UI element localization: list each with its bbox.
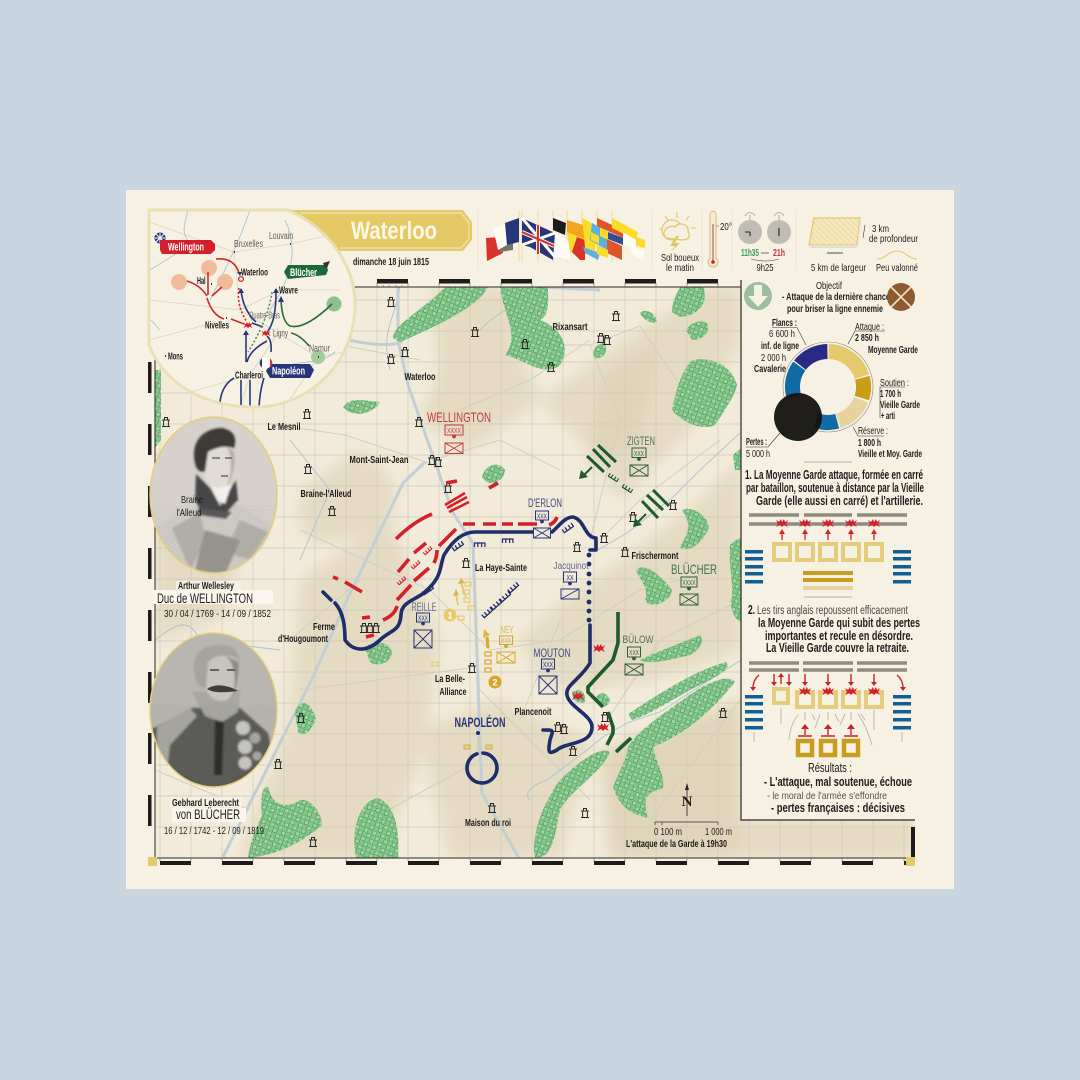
icon: weather: le matin bbox=[666, 262, 694, 274]
icon: chronometers and duration bbox=[738, 212, 791, 274]
scale bar: L'attaque de la Garde à 19h30 bbox=[626, 839, 727, 850]
Wellington's red line bbox=[333, 481, 557, 637]
step 2 text: 2. bbox=[748, 603, 755, 617]
donut labels: Cavalerie bbox=[754, 364, 786, 375]
unit echelon marks: XXX bbox=[629, 648, 639, 657]
French combs bbox=[422, 523, 574, 618]
Napoleon tag bbox=[260, 358, 314, 378]
objective text: pour briser la ligne ennemie bbox=[787, 303, 883, 315]
panel: strategic inset map bbox=[149, 210, 355, 407]
inset place names bbox=[168, 231, 330, 382]
unit symbols bbox=[414, 425, 698, 694]
icon: chronometers and duration: 11h35 bbox=[741, 248, 759, 259]
donut labels: Moyenne Garde bbox=[868, 345, 918, 356]
scale bar bbox=[626, 822, 732, 850]
Ney cavalry, yellow units: 1 bbox=[447, 610, 453, 620]
forests bbox=[155, 280, 741, 858]
objective text: - Attaque de la dernière chance bbox=[782, 291, 890, 303]
inset place names: Hal bbox=[197, 276, 206, 287]
title banner: Waterloo bbox=[351, 217, 437, 245]
icon: chronometers and duration: 21h bbox=[773, 248, 785, 259]
results text: - L'attaque, mal soutenue, échoue bbox=[764, 775, 912, 789]
portrait: Blucher bbox=[150, 633, 280, 790]
place names: Waterloo bbox=[404, 371, 436, 383]
step 1 text: 1. La Moyenne Garde attaque, formée en carré bbox=[745, 468, 923, 482]
Wellington tag: Wellington bbox=[168, 242, 204, 254]
commander labels: REILLE bbox=[412, 602, 437, 614]
unit echelon marks: XXXX bbox=[447, 426, 461, 435]
commander labels: BÜLOW bbox=[622, 634, 654, 646]
step 2 text: importantes et recule en désordre. bbox=[765, 629, 913, 643]
commander labels: Jacquinot bbox=[554, 560, 589, 572]
inset movement arrows bbox=[187, 259, 332, 407]
inset terrain lines bbox=[149, 222, 355, 407]
icon: weather: Sol boueux bbox=[661, 252, 700, 264]
inset place names: Nivelles bbox=[205, 320, 229, 332]
battle blasts bbox=[572, 644, 609, 731]
commander labels bbox=[412, 409, 717, 730]
inset place names: Mons bbox=[168, 352, 183, 362]
commander labels: NAPOLÉON bbox=[454, 714, 506, 730]
title banner bbox=[286, 210, 472, 251]
unit echelon marks: XXX bbox=[634, 449, 644, 458]
donut labels: 5 000 h bbox=[746, 449, 770, 460]
donut labels: 6 600 h bbox=[769, 329, 795, 340]
caption: Blucher bbox=[164, 797, 264, 837]
place names: La Belle- bbox=[435, 673, 465, 685]
donut labels: inf. de ligne bbox=[761, 341, 799, 352]
unit echelon marks bbox=[418, 426, 696, 669]
battlefield block bbox=[809, 218, 918, 274]
Waterloo marker bbox=[239, 277, 243, 281]
results text: - le moral de l'armée s'effondre bbox=[767, 790, 887, 802]
battlefield block: 5 km de largeur bbox=[811, 262, 866, 274]
Wellington tag bbox=[154, 232, 215, 254]
commander labels: WELLINGTON bbox=[427, 409, 491, 425]
portrait: Wellington: Braine bbox=[181, 494, 203, 506]
step 2 text: La Vieille Garde couvre la retraite. bbox=[766, 641, 909, 655]
commander labels: ZIGTEN bbox=[627, 434, 655, 448]
step 1 text: par bataillon, soutenue à distance par la Vieille bbox=[746, 481, 924, 495]
Blucher tag bbox=[284, 261, 330, 279]
step 2 text: la Moyenne Garde qui subit des pertes bbox=[758, 616, 920, 630]
streams bbox=[155, 287, 741, 800]
place names bbox=[268, 321, 679, 829]
flags of the armies bbox=[486, 210, 645, 262]
scale bar: 0 100 m bbox=[654, 827, 682, 838]
panel: right sidebar bbox=[741, 280, 926, 820]
step 2 text bbox=[748, 603, 920, 655]
inset place names: Namur bbox=[309, 344, 330, 354]
place names: Alliance bbox=[440, 686, 467, 698]
diagram 2: retreat bbox=[745, 663, 911, 755]
commander labels: NEY bbox=[500, 624, 514, 636]
donut labels: Pertes : bbox=[746, 437, 767, 448]
inset forests and towns bbox=[171, 260, 342, 364]
place names: Plancenoit bbox=[514, 706, 552, 718]
north arrow: N bbox=[682, 794, 693, 810]
place names: Le Mesnil bbox=[268, 421, 301, 433]
step 2 text: Les tirs anglais repoussent efficacement bbox=[757, 605, 909, 617]
header dividers bbox=[478, 210, 796, 270]
inset frame bbox=[149, 210, 355, 407]
north arrow bbox=[682, 783, 693, 816]
objective text: Objectif bbox=[816, 280, 842, 292]
place names: Mont-Saint-Jean bbox=[350, 454, 408, 466]
caption: Wellington bbox=[153, 580, 273, 620]
poster sheet bbox=[126, 190, 954, 889]
unit echelon marks: XXXX bbox=[682, 578, 696, 587]
battlefield block: 3 km bbox=[872, 223, 889, 235]
donut labels: 1 700 h bbox=[880, 389, 901, 400]
battle map bbox=[155, 280, 915, 860]
unit echelon marks: XXX bbox=[418, 614, 428, 622]
caption: Blucher: 16 / 12 / 1742 - 12 / 09 / 1819 bbox=[164, 825, 264, 837]
battlefield block: Peu valonné bbox=[876, 262, 918, 274]
caption: Blucher: Gebhard Leberecht bbox=[172, 797, 239, 809]
inset place names: Wavre bbox=[279, 286, 298, 296]
place names: Maison du roi bbox=[465, 817, 511, 829]
inset place names: Charleroi bbox=[235, 370, 263, 382]
place names: d'Hougoumont bbox=[278, 633, 328, 645]
Prussian green lines bbox=[583, 445, 669, 752]
diagram 1: attack formation bbox=[745, 515, 911, 590]
commander labels: MOUTON bbox=[534, 648, 570, 660]
unit echelon marks: XXX bbox=[543, 660, 553, 669]
Napoleon tag: Napoléon bbox=[272, 366, 305, 378]
portrait: Wellington bbox=[150, 417, 280, 580]
place names: La Haye-Sainte bbox=[475, 562, 527, 574]
donut labels bbox=[746, 318, 922, 460]
donut labels: Vieille et Moy. Garde bbox=[858, 449, 922, 460]
grid bbox=[155, 287, 915, 858]
donut labels: 1 800 h bbox=[858, 438, 881, 449]
inset town dots bbox=[165, 244, 319, 357]
step 1 text: Garde (elle aussi en carré) et l'artillerie. bbox=[756, 494, 923, 508]
commander labels: D'ERLON bbox=[528, 498, 562, 510]
place names: Braine-l'Alleud bbox=[300, 488, 352, 500]
inset place names: Louvain bbox=[269, 231, 293, 242]
step 1 text bbox=[745, 468, 924, 508]
Garde attack line, French blue bbox=[323, 517, 596, 784]
caption: Wellington: 30 / 04 / 1769 - 14 / 09 / 1852 bbox=[164, 608, 271, 620]
donut labels: 2 000 h bbox=[761, 353, 786, 364]
Ney cavalry, yellow units: 2 bbox=[492, 678, 498, 688]
inset place names: Waterloo bbox=[241, 268, 268, 278]
place names: Rixansart bbox=[552, 321, 588, 333]
caption: Wellington: Duc de WELLINGTON bbox=[157, 591, 253, 606]
icon: weather bbox=[659, 212, 700, 274]
inset place names: Ligny bbox=[273, 328, 288, 340]
unit echelon marks: XX bbox=[566, 573, 574, 582]
French advance dots bbox=[476, 553, 591, 735]
icon: crossed swords bbox=[887, 283, 915, 311]
portrait: Wellington: l'Alleud bbox=[176, 507, 202, 519]
caption: Wellington: Arthur Wellesley bbox=[178, 580, 234, 592]
minor roads bbox=[155, 287, 741, 820]
unit echelon marks: XXX bbox=[537, 512, 547, 520]
date: dimanche 18 juin 1815 bbox=[353, 257, 429, 268]
icon: thermometer: 20° bbox=[720, 221, 732, 233]
donut labels: Soutien : bbox=[880, 378, 909, 389]
results text: Résultats : bbox=[808, 761, 852, 775]
place names: Frischermont bbox=[632, 550, 679, 562]
scale bar: 1 000 m bbox=[705, 827, 732, 838]
caption: Blucher: von BLÜCHER bbox=[176, 807, 240, 822]
donut labels: Réserve : bbox=[858, 426, 888, 437]
inset place names: Quatre-Bras bbox=[249, 310, 280, 322]
objective text bbox=[782, 280, 890, 315]
chart: force donut bbox=[783, 342, 873, 432]
map buildings bbox=[162, 298, 727, 846]
icon: down arrow bbox=[744, 282, 772, 310]
main roads bbox=[223, 287, 600, 860]
Blucher tag: Blücher bbox=[290, 267, 317, 279]
donut labels: + arti bbox=[881, 411, 895, 422]
green arrowheads bbox=[579, 470, 642, 527]
Ney cavalry, yellow units bbox=[432, 578, 502, 749]
red cavalry combs bbox=[397, 546, 432, 585]
commander labels: BLÜCHER bbox=[671, 560, 717, 577]
icon: thermometer bbox=[708, 211, 732, 267]
battlefield block: de profondeur bbox=[869, 233, 918, 245]
results text: - pertes françaises : décisives bbox=[771, 801, 905, 815]
inset place names: Bruxelles bbox=[234, 239, 263, 250]
losses disc bbox=[774, 393, 822, 441]
results text bbox=[764, 761, 912, 815]
donut labels: 2 850 h bbox=[855, 333, 879, 344]
donut labels: Vieille Garde bbox=[880, 400, 920, 411]
ruler frame and ticks bbox=[148, 279, 915, 866]
donut labels: Attaque : bbox=[855, 322, 884, 333]
green combs bbox=[608, 473, 633, 493]
icon: chronometers and duration: 9h25 bbox=[756, 262, 774, 274]
place names: Ferme bbox=[313, 621, 335, 633]
donut labels: Flancs : bbox=[772, 318, 797, 329]
unit echelon marks: XXX bbox=[501, 636, 511, 645]
